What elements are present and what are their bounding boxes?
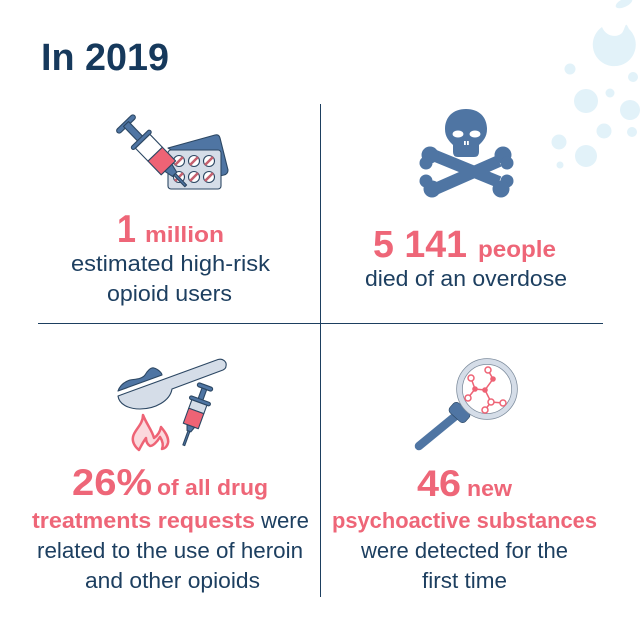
text: 1 million: estimated high-risk bbox=[71, 251, 271, 276]
text: 46 new psychoactive substances: first time bbox=[422, 568, 507, 593]
text: 26% of all drug treatment requests: of all drug bbox=[157, 475, 268, 500]
text: 26% of all drug treatment requests: and other opioids bbox=[85, 568, 260, 593]
text: 46 new psychoactive substances: 46 bbox=[417, 463, 461, 504]
text: 5 141 people: people bbox=[478, 236, 556, 262]
text: 5 141 people bbox=[365, 224, 567, 291]
icon: magnifying glass with molecule bbox=[419, 362, 514, 446]
text: 46 new psychoactive substances: were detected for the bbox=[360, 538, 568, 563]
text: 5 141 people: died of an overdose bbox=[365, 266, 567, 291]
text: 1 million bbox=[71, 208, 271, 306]
text: 5 141 people: 5 141 bbox=[373, 224, 467, 266]
text: 46 new psychoactive substances: new bbox=[467, 476, 513, 501]
decorative bubbles bbox=[552, 0, 640, 169]
text: 1 million: 1 bbox=[117, 208, 136, 251]
text: 26% of all drug treatment requests: related to the use of heroin bbox=[37, 538, 303, 563]
text: 1 million: opioid users bbox=[107, 281, 232, 306]
text: 46 new psychoactive substances: psychoactive substances bbox=[332, 508, 597, 533]
icon: skull and crossbones bbox=[420, 109, 514, 198]
text: 46 new psychoactive substances bbox=[332, 463, 597, 593]
text: 26% of all drug treatment requests: treatments requests bbox=[32, 508, 255, 533]
text: 1 million: million bbox=[145, 222, 224, 247]
icon: spoon, flame and syringe bbox=[118, 359, 226, 450]
title: In 2019 bbox=[41, 37, 169, 79]
text: 26% of all drug treatment requests: 26% bbox=[72, 462, 152, 503]
text: 26% of all drug treatment requests bbox=[32, 462, 309, 593]
text: 26% of all drug treatment requests: were bbox=[260, 508, 309, 533]
grid dividers bbox=[38, 104, 603, 597]
icon: syringe and pills bbox=[115, 113, 228, 195]
